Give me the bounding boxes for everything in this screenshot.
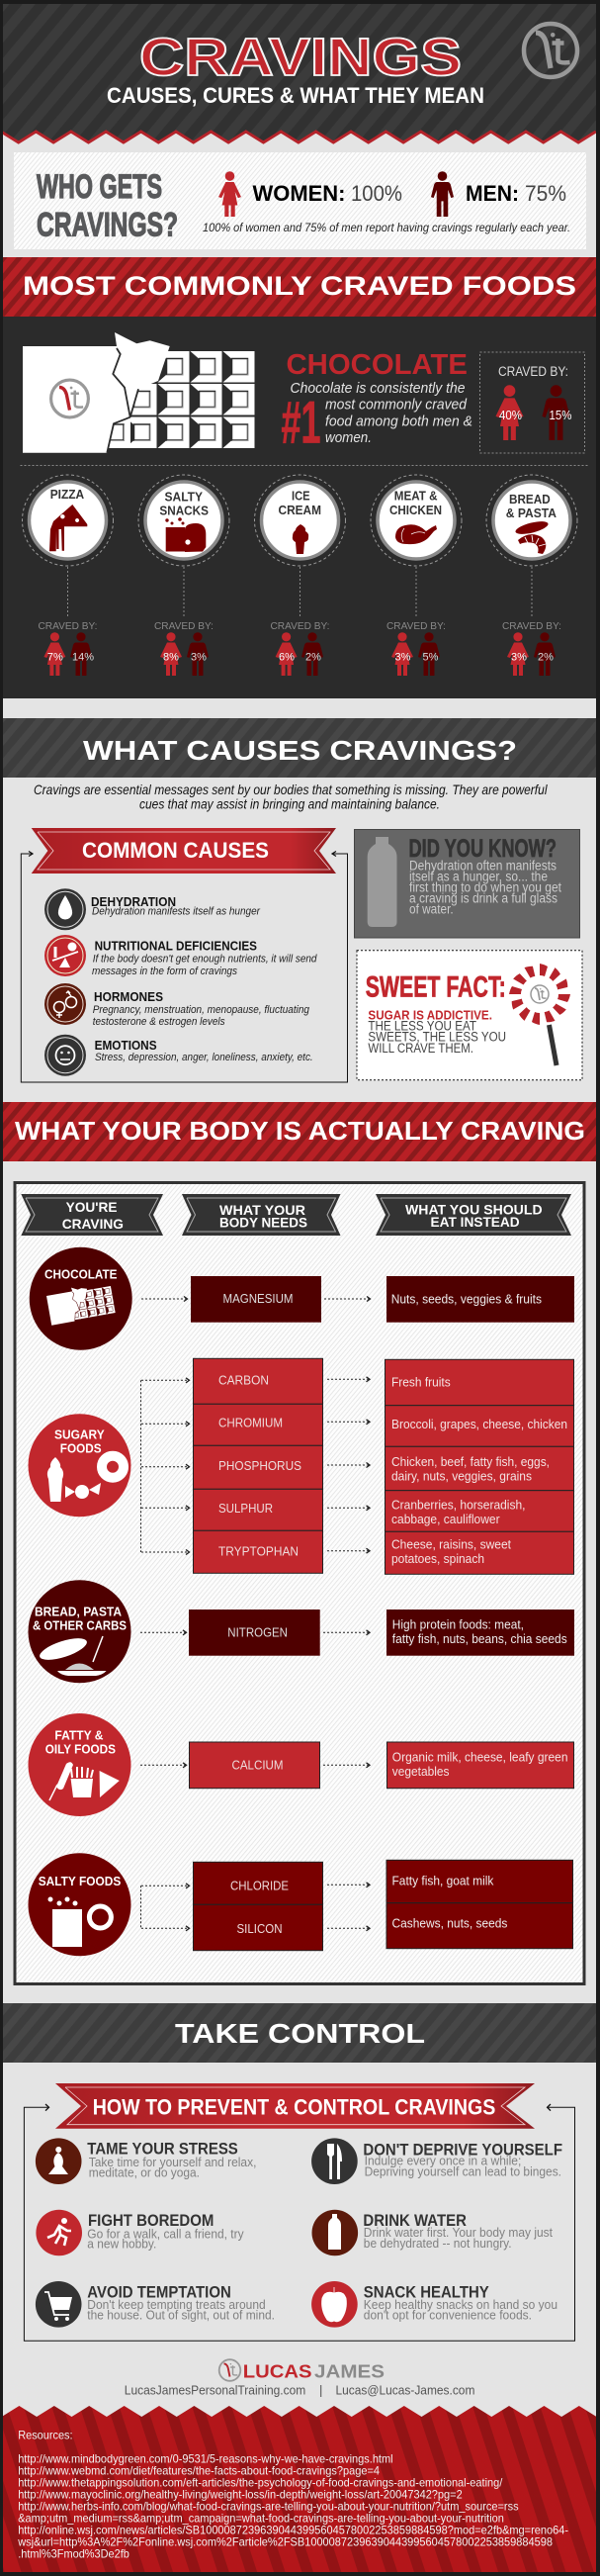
food: bread and pasta: 3% [511,651,527,663]
tip: fight boredom [36,2210,244,2255]
row: sugary foods: potatoes, spinach [391,1551,484,1566]
text: resources list: .html%3Fmod%3De2fb [18,2547,129,2561]
text: chocolate description: food among both men & [325,414,472,429]
tip: fight boredom: FIGHT BOREDOM [88,2211,214,2230]
tip: snack healthy: SNACK HEALTHY [364,2283,489,2302]
text: causes intro [34,782,548,811]
icon: chips and pretzel [47,1897,111,1947]
panel: did you know [354,829,579,938]
row: fatty and oily foods: FATTY & [54,1727,103,1742]
footer: contact links: LucasJamesPersonalTraining.com [125,2383,305,2398]
text: chocolate description [291,381,472,446]
row: bread, pasta and other carbs [28,1580,574,1683]
tip: don't deprive yourself: Indulge every once in a while; [365,2153,521,2167]
row: salty foods: CHLORIDE [230,1879,289,1893]
icon: mini chocolate bar [45,1281,116,1326]
column header: what your body needs [182,1194,340,1236]
text: did you know body: Dehydration often manifests [409,858,557,873]
row: fatty and oily foods: Organic milk, cheese, leafy green [392,1750,567,1765]
subtitle: CAUSES, CURES & WHAT THEY MEAN [107,83,484,108]
banner: take control: TAKE CONTROL [175,2018,425,2049]
text: chocolate description: women. [325,430,372,446]
food: ice cream: CRAVED BY: [271,620,330,632]
icon: bottle [328,2214,341,2250]
tip: avoid temptation: Don't keep tempting treats around [87,2297,266,2312]
food: bread and pasta: CRAVED BY: [502,620,561,632]
food: meat and chicken: CHICKEN [389,504,442,517]
banner: most commonly craved foods [0,257,600,317]
icon: chips and pretzel [165,517,206,552]
banner: what causes cravings: WHAT CAUSES CRAVINGS? [83,735,517,766]
cause: hormones: Pregnancy, menstruation, menopause, fluctuating [93,1004,310,1016]
cause: emotions: Stress, depression, anger, loneliness, anxiety, etc. [95,1052,313,1063]
column header: you're craving [21,1194,163,1236]
icon: pizza slice [49,505,87,551]
cause: nutritional deficiencies: NUTRITIONAL DEFICIENCIES [95,939,257,954]
row: salty foods: Fatty fish, goat milk [391,1874,494,1888]
icon: sweets [47,1456,124,1502]
caption: 100% of women and 75% of men report having cravings regularly each year. [203,223,570,234]
footer: contact links: | [319,2383,322,2398]
banner: what causes cravings [0,718,600,778]
cause: hormones: HORMONES [94,989,163,1004]
panel: sweet fact: SWEET FACT: [366,970,506,1003]
tip: snack healthy: Keep healthy snacks on hand so you [364,2297,557,2312]
box: chocolate craved by: 40% [499,408,522,422]
row: fatty and oily foods: OILY FOODS [45,1742,116,1757]
cause: hormones [44,983,310,1028]
tip: don't deprive yourself [311,2138,562,2184]
tip: drink water: be dehydrated -- not hungry. [364,2236,512,2251]
footer: lucas james logo: LUCAS [243,2361,312,2381]
cause: nutritional deficiencies: messages in the form of cravings [92,966,237,977]
cause: emotions: EMOTIONS [95,1038,157,1053]
row: bread, pasta and other carbs: NITROGEN [227,1624,288,1639]
tip: don't deprive yourself: Depriving yourself can lead to binges. [365,2163,561,2178]
icon: ice cream cone [293,524,308,554]
text: did you know body: first thing to do when you get [409,880,561,895]
row: sugary foods: PHOSPHORUS [218,1458,301,1473]
text: chocolate description: Chocolate is consistently the [291,381,465,397]
cause: emotions [44,1035,313,1076]
icon: corn dog, fries, pizza [49,1762,120,1800]
food: ice cream: ICE [292,489,310,503]
icon: roast chicken [395,524,437,544]
footer: contact links [125,2383,474,2398]
row: bread, pasta and other carbs: & OTHER CARBS [33,1618,127,1633]
text: resources list: &amp;utm_medium=rss&amp;utm_campaign=what-food-cravings-are-telling-you-about-your-nutrition [18,2512,504,2526]
text: resources list: http://www.webmd.com/diet/features/the-facts-about-food-cravings?page=4 [18,2464,380,2478]
heading: who gets cravings: CRAVINGS? [37,206,178,243]
row: sugary foods: FOODS [60,1441,102,1456]
food: meat and chicken: CRAVED BY: [386,620,446,632]
text: resources list: wsj&url=http%3A%2F%2Fonline.wsj.com%2Farticle%2FSB10000872396390443995604578002253859884598 [17,2535,553,2549]
food: ice cream [255,475,346,676]
text: did you know body: a craving is drink a full glass [409,891,557,906]
row: chocolate: CHOCOLATE [44,1267,118,1282]
banner: most commonly craved foods: MOST COMMONLY CRAVED FOODS [23,271,576,301]
column header: what you should eat instead: EAT INSTEAD [431,1214,520,1230]
food: pizza: PIZZA [50,488,84,502]
food: salty snacks [138,475,229,676]
tip: tame your stress: TAME YOUR STRESS [87,2140,238,2159]
box: chocolate craved by: CRAVED BY: [498,364,568,379]
row: bread, pasta and other carbs: fatty fish, nuts, beans, chia seeds [392,1631,567,1646]
row: sugary foods [28,1358,573,1574]
icon: shopping cart [44,2292,72,2321]
illustration: chocolate bar [23,332,255,453]
text: sweet fact body: WILL CRAVE THEM. [368,1041,473,1056]
ribbon: common causes [32,828,336,874]
stat: women 100%: 100% [351,181,402,206]
text: did you know body: of water. [409,901,454,916]
row: bread, pasta and other carbs: High protein foods: meat, [392,1617,524,1632]
icon: bread and spaghetti [38,1634,107,1676]
food: pizza: 14% [72,651,94,663]
food: meat and chicken: 3% [395,651,411,663]
icon: water bottle [368,837,397,927]
box: chocolate craved by: 15% [550,408,572,422]
tip: snack healthy: don't opt for convenience foods. [364,2308,532,2323]
tip: avoid temptation: the house. Out of sight, out of mind. [87,2308,275,2323]
column header: what your body needs: BODY NEEDS [219,1215,307,1231]
panel: sweet fact [357,951,582,1080]
row: sugary foods: cabbage, cauliflower [391,1512,500,1526]
icon: lollipop [509,964,570,1065]
cause: dehydration: Dehydration manifests itself as hunger [92,906,261,918]
row: fatty and oily foods: CALCIUM [231,1758,283,1773]
row: salty foods [28,1853,573,1956]
text: sweet fact body: SUGAR IS ADDICTIVE. [368,1008,492,1023]
text: causes intro: cues that may assist in bringing and maintaining balance. [139,795,440,811]
row: sugary foods: CARBON [218,1372,269,1387]
tip: drink water [312,2210,553,2255]
food: salty snacks: 8% [163,651,179,663]
tip: don't deprive yourself: DON'T DEPRIVE YOURSELF [363,2140,562,2159]
icon: apple [322,2287,346,2322]
tip: tame your stress [36,2138,256,2184]
icon: yoga [48,2147,68,2174]
column header: you're craving: YOU'RE [66,1199,117,1215]
food: bread and pasta: 2% [538,651,554,663]
text: sweet fact body: SWEETS, THE LESS YOU [368,1030,506,1045]
food: pizza: CRAVED BY: [38,620,97,632]
food: bread and pasta: BREAD [509,493,551,506]
cause: dehydration: DEHYDRATION [91,894,176,909]
text: resources list: http://www.herbs-info.com/blog/what-food-cravings-are-telling-you-about-your-nutrition/?utm_source=rss [18,2500,519,2514]
icon: runner [47,2218,71,2246]
row: sugary foods: TRYPTOPHAN [218,1544,299,1559]
food: salty snacks: SALTY [164,491,204,505]
food: bread and pasta [486,475,577,676]
panel: craving table [15,1183,584,1984]
stat: women 100% [253,181,402,206]
row: sugary foods: Cheese, raisins, sweet [391,1536,511,1551]
banner: what your body is actually craving [0,1102,600,1161]
cause: nutritional deficiencies: If the body doesn't get enough nutrients, it will send [93,954,317,966]
stat: women 100%: WOMEN: [253,181,346,206]
food: pizza: 7% [47,651,63,663]
row: fatty and oily foods: vegetables [392,1764,450,1779]
row: sugary foods: CHROMIUM [218,1416,283,1430]
icon: bread and croissant [514,519,550,554]
food: meat and chicken: MEAT & [394,489,437,503]
tip: fight boredom: Go for a walk, call a friend, try [87,2226,244,2241]
tip: tame your stress: meditate, or do yoga. [89,2165,200,2180]
panel: prevent and control cravings [24,2083,574,2341]
row: chocolate: Nuts, seeds, veggies & fruits [391,1292,542,1307]
icon: brand logo [524,24,577,77]
footer: contact links: Lucas@Lucas-James.com [336,2383,474,2398]
food: salty snacks: SNACKS [159,505,209,518]
column header: you're craving: CRAVING [62,1216,124,1232]
text: chocolate description: most commonly craved [325,398,468,414]
heading: chocolate: CHOCOLATE [287,349,468,381]
row: salty foods: SILICON [237,1921,283,1936]
row: bread, pasta and other carbs: BREAD, PASTA [35,1604,123,1618]
column header: what you should eat instead [376,1194,571,1236]
ribbon: how to prevent and control cravings [55,2083,535,2129]
row: sugary foods: dairy, nuts, veggies, grains [391,1469,532,1484]
heading: who gets cravings: WHO GETS [37,168,162,206]
heading: who gets cravings [37,168,178,243]
text: sweet fact body: THE LESS YOU EAT [368,1019,476,1034]
food: pizza [22,475,113,676]
ribbon: how to prevent and control cravings: HOW TO PREVENT & CONTROL CRAVINGS [93,2094,495,2119]
row: chocolate: MAGNESIUM [223,1291,293,1306]
tip: drink water: Drink water first. Your body may just [364,2225,553,2240]
row: sugary foods: SUGARY [54,1426,105,1441]
text: resources list: http://www.mindbodygreen.com/0-9531/5-reasons-why-we-have-cravings.html [18,2452,393,2466]
icon: fork and knife [327,2144,342,2179]
header band [0,0,600,142]
food: meat and chicken: 5% [423,651,439,663]
food: salty snacks: 3% [191,651,207,663]
row: chocolate [30,1247,574,1350]
banner: take control [0,2003,600,2063]
food: ice cream: CREAM [279,504,321,517]
cause: nutritional deficiencies [44,935,317,977]
row: sugary foods: Broccoli, grapes, cheese, chicken [391,1417,567,1431]
row: fatty and oily foods [28,1713,573,1816]
ribbon: common causes: COMMON CAUSES [82,838,269,863]
cause: dehydration [44,888,261,930]
panel: who gets cravings [14,152,586,249]
row: salty foods: Cashews, nuts, seeds [391,1915,508,1930]
row: salty foods: SALTY FOODS [39,1874,122,1888]
icon: woman [218,171,241,217]
tip: avoid temptation: AVOID TEMPTATION [87,2283,231,2302]
banner: what your body is actually craving: WHAT YOUR BODY IS ACTUALLY CRAVING [15,1116,585,1146]
row: sugary foods: Fresh fruits [391,1375,451,1390]
food: salty snacks: CRAVED BY: [154,620,214,632]
footer: lucas james logo [219,2359,385,2381]
panel: resources [0,2406,600,2576]
text: resources list [17,2429,568,2561]
food: bread and pasta: & PASTA [506,506,557,520]
tip: drink water: DRINK WATER [363,2211,467,2230]
tip: tame your stress: Take time for yourself and relax, [89,2155,256,2169]
footer: lucas james logo: JAMES [314,2361,385,2381]
box: chocolate craved by [480,352,585,453]
stat: men 75% [466,181,566,206]
tip: fight boredom: a new hobby. [87,2237,156,2252]
text: resources list: http://www.thetappingsolution.com/eft-articles/the-psychology-of-food-cravings-and-emotional-eating/ [18,2476,503,2490]
icon: logo on wrapper [51,380,88,417]
column header: what you should eat instead: WHAT YOU SHOULD [405,1201,543,1217]
food: ice cream: 2% [305,651,321,663]
tip: avoid temptation [36,2281,275,2328]
tip: snack healthy [311,2281,557,2328]
text: resources list: Resources: [18,2429,73,2442]
stat: men 75%: 75% [525,181,566,206]
cause: hormones: testosterone & estrogen levels [93,1016,225,1028]
panel: craved foods [0,317,600,698]
panel: common causes [21,828,348,1082]
title: CRAVINGS [139,28,462,87]
text: did you know body: itself as a hunger, so... the [409,869,548,883]
row: sugary foods: Cranberries, horseradish, [391,1497,526,1512]
stat: men 75%: MEN: [466,181,519,206]
text: did you know body [409,858,561,916]
icon: man [431,171,454,217]
food: ice cream: 6% [279,651,295,663]
text: sweet fact body [368,1008,506,1056]
text: resources list: http://www.mayoclinic.org/healthy-living/weight-loss/in-depth/weight-loss/art-20047342?pg=2 [18,2488,463,2502]
number one: #1 [281,390,320,455]
row: sugary foods: SULPHUR [218,1501,273,1516]
column header: what your body needs: WHAT YOUR [219,1202,305,1218]
food: meat and chicken [371,475,462,676]
row: sugary foods: Chicken, beef, fatty fish, eggs, [391,1454,550,1469]
